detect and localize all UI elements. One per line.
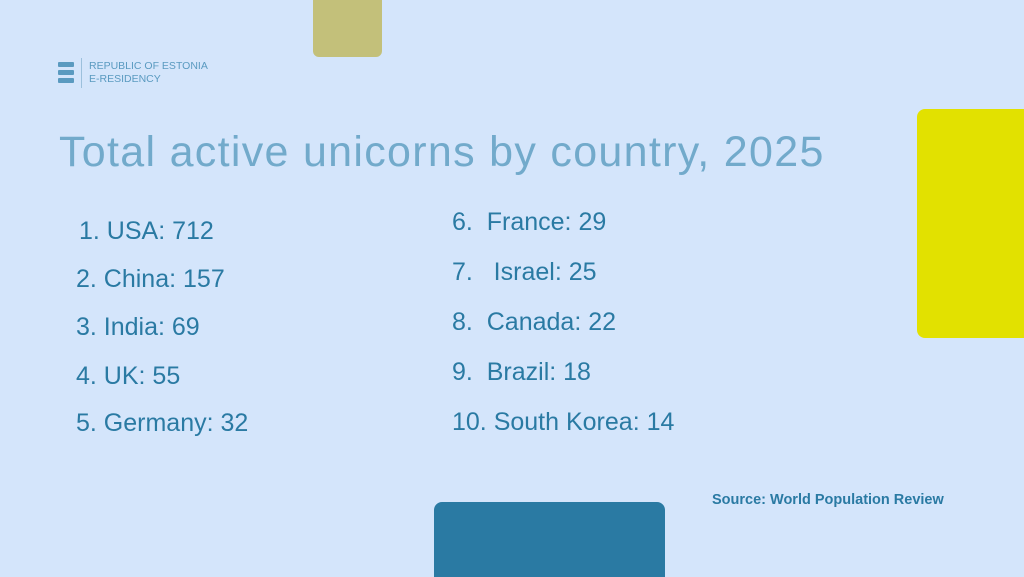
list: left column: 1. USA: 712 (79, 217, 214, 245)
list: left column: 5. Germany: 32 (76, 409, 248, 437)
logo text: REPUBLIC OF ESTONIA (89, 60, 208, 72)
list: left column: 3. India: 69 (76, 313, 200, 341)
decorative block: blue bottom (434, 502, 665, 577)
source note: Source: World Population Review (712, 492, 944, 508)
decorative block: yellow right (917, 109, 1024, 338)
list: left column: 4. UK: 55 (76, 362, 180, 390)
list: right column: 8. Canada: 22 (452, 308, 616, 336)
list: right column: 6. France: 29 (452, 208, 606, 236)
list: right column (452, 208, 674, 436)
list: right column: 7. Israel: 25 (452, 258, 597, 286)
list: right column: 9. Brazil: 18 (452, 358, 591, 386)
logo text: E-RESIDENCY (89, 73, 161, 85)
list: left column (76, 217, 248, 437)
icon: coat of arms (58, 62, 74, 83)
decorative block: olive top (313, 0, 382, 57)
list: left column: 2. China: 157 (76, 265, 225, 293)
title: Total active unicorns by country, 2025 (59, 128, 825, 176)
logo (58, 58, 208, 88)
list: right column: 10. South Korea: 14 (452, 408, 674, 436)
logo text (89, 60, 208, 85)
